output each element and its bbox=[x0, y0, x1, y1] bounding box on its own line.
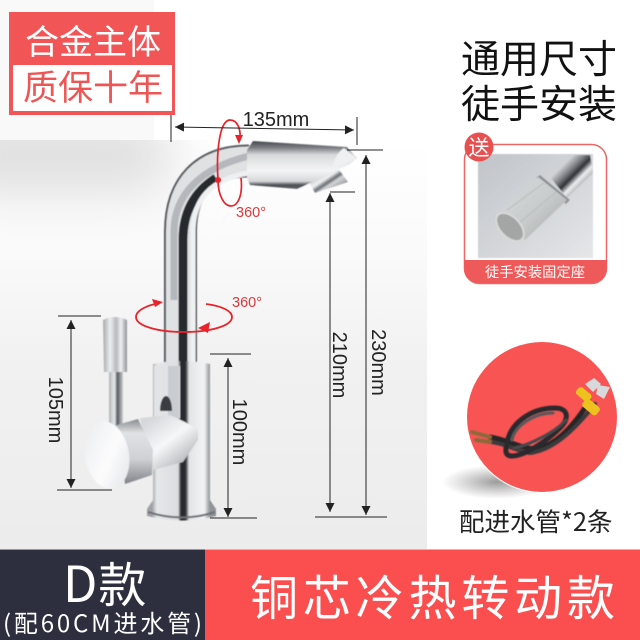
faucet: handle pin bbox=[160, 396, 172, 411]
footer: product name: 铜芯冷热转动款 bbox=[250, 559, 615, 629]
faucet: column dark inset bbox=[168, 366, 179, 418]
background: studio backdrop bbox=[0, 140, 427, 549]
faucet bbox=[79, 141, 357, 520]
faucet: horizontal valve body bbox=[140, 415, 198, 470]
caption: water hose x 2: 配进水管*2条 bbox=[459, 502, 613, 539]
dimension: 210mm: 210mm bbox=[328, 332, 350, 398]
faucet: spout head bbox=[247, 141, 357, 189]
badge: alloy body, ten-year warranty: 合金主体 bbox=[25, 15, 161, 64]
dimension: 135mm bbox=[171, 109, 357, 145]
faucet: curved spout pipe bbox=[174, 156, 249, 366]
footer: model label bbox=[0, 545, 205, 640]
dimension: 135mm: 135mm bbox=[243, 109, 309, 131]
caption band: 徒手安装固定座 bbox=[485, 261, 585, 282]
image: mounting seat on pipe bbox=[478, 154, 593, 258]
dimension: 230mm: 230mm bbox=[367, 329, 389, 396]
panel: water hoses circle bbox=[466, 341, 618, 493]
faucet: aerator bbox=[309, 167, 348, 193]
faucet: knob cylinder bbox=[117, 419, 153, 484]
heading: universal size, install by hand bbox=[461, 29, 617, 130]
badge: free gift: 送 bbox=[468, 132, 490, 162]
heading: universal size, install by hand: 徒手安装 bbox=[461, 74, 617, 130]
caption band bbox=[464, 260, 607, 283]
icon: hose yellow nuts and fittings bbox=[575, 378, 610, 417]
icon: braided hoses bbox=[472, 402, 595, 456]
faucet: upper column notch bbox=[154, 366, 180, 418]
footer: product name bbox=[205, 550, 640, 640]
red arrow: 360 degree spout rotation bbox=[215, 120, 266, 221]
faucet: body column bbox=[147, 361, 216, 520]
badge: alloy body, ten-year warranty bbox=[9, 12, 175, 115]
faucet: spout tip face bbox=[332, 148, 357, 168]
dimension: 100mm: 100mm bbox=[228, 399, 250, 465]
faucet: base ring bbox=[148, 512, 215, 518]
faucet: lever grip bbox=[103, 317, 127, 372]
dimension: 105mm: 105mm bbox=[44, 377, 66, 443]
heading: universal size, install by hand: 通用尺寸 bbox=[461, 29, 617, 85]
badge: alloy body, ten-year warranty: 质保十年 bbox=[23, 60, 163, 111]
icon: shadow under hose circle bbox=[442, 465, 552, 499]
faucet: knob face bbox=[79, 418, 135, 492]
footer: model label: D款 bbox=[63, 545, 146, 617]
faucet: lever stem bbox=[109, 372, 123, 426]
panel: free mounting seat bbox=[464, 132, 607, 284]
red arrow: 360 degree base rotation bbox=[136, 295, 262, 333]
red arrow: 360 degree spout rotation: 360° bbox=[236, 205, 266, 221]
footer: model label: (配60CM进水管) bbox=[3, 604, 202, 639]
red arrow: 360 degree base rotation: 360° bbox=[232, 295, 262, 311]
